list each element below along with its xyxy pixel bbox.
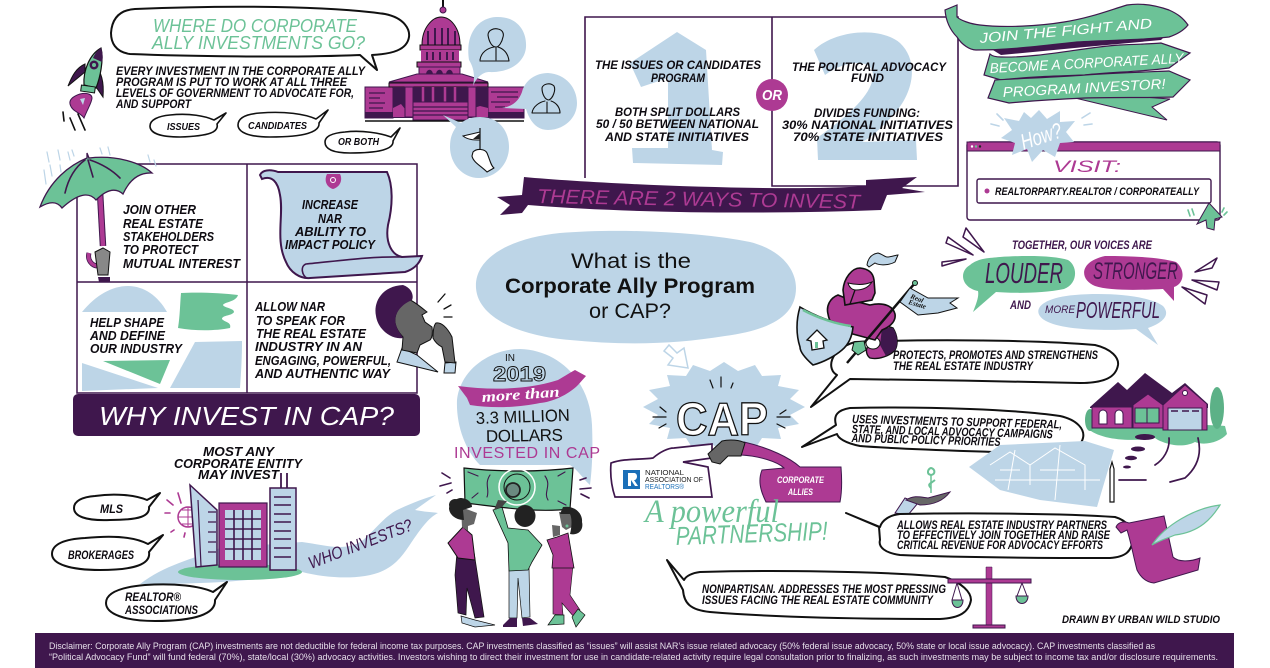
numeral 1: [630, 32, 723, 165]
blue bubble: [476, 231, 796, 343]
icon: knight with shield and flag: [797, 253, 958, 365]
speech bubble: where do corporate ally investments go: WHERE DO CORPORATE: [153, 16, 358, 36]
icon: three people looking at bill: [448, 498, 585, 627]
text: allow NAR: [254, 299, 391, 381]
text: option two: 70% STATE INITIATIVES: [793, 130, 943, 144]
grid lines: [77, 164, 417, 393]
speech bubble: where do corporate ally investments go: [111, 7, 409, 70]
icon: city buildings: [165, 473, 302, 580]
disclaimer footer: [35, 633, 1234, 668]
text block: every investment: LEVELS OF GOVERNMENT TO ADVOCATE FOR,: [116, 86, 354, 100]
text: option two: DIVIDES FUNDING:: [814, 106, 920, 120]
text: option one: AND STATE INITIATIVES: [604, 130, 749, 144]
shapes and text: help shape: AND DEFINE: [89, 328, 165, 343]
icon: person speaking: [375, 285, 456, 373]
bubble: protects: PROTECTS, PROMOTES AND STRENGTHENS: [893, 348, 1098, 362]
bubble: uses investments: USES INVESTMENTS TO SUPPORT FEDERAL,: [852, 412, 1062, 431]
bubble: MLS: MLS: [100, 502, 123, 516]
partnership: corporate allies box: ALLIES: [787, 487, 813, 497]
icon: hand with sprout: [895, 468, 950, 515]
bubble: issues: ISSUES: [167, 122, 200, 133]
bubble: or both: [325, 128, 400, 153]
text block: every investment: EVERY INVESTMENT IN THE CORPORATE ALLY: [116, 64, 366, 78]
bubble: stronger: [1084, 256, 1183, 301]
text: option one: PROGRAM: [651, 71, 706, 85]
text: in 2019: 2019: [493, 363, 546, 386]
browser window: REALTORPARTY.REALTOR / CORPORATEALLY: [995, 186, 1200, 198]
blue swoosh: [140, 495, 438, 584]
bubble: allows partners: TO EFFECTIVELY JOIN TOGETHER AND RAISE: [897, 528, 1111, 542]
badge: or: [756, 79, 788, 111]
bubble: uses investments: [802, 407, 1083, 454]
bubble: candidates: CANDIDATES: [248, 121, 307, 132]
text: allow NAR: TO SPEAK FOR: [256, 313, 346, 328]
text: option one: 50 / 50 BETWEEN NATIONAL: [596, 117, 759, 131]
text: most any corporate entity: MOST ANY: [203, 444, 275, 459]
panel: 2019 stat: [440, 349, 600, 627]
text: 3.3 million dollars: INVESTED IN CAP: [454, 445, 600, 462]
badge: or: OR: [762, 87, 782, 104]
icon: handshake: [708, 440, 745, 464]
text: and: AND: [1009, 298, 1031, 312]
partnership: corporate allies box: CORPORATE: [777, 475, 825, 485]
bubble: realtor associations: [106, 582, 227, 621]
scroll: increase NAR ability: NAR: [318, 211, 343, 226]
bubble: protects: THE REAL ESTATE INDUSTRY: [893, 359, 1034, 373]
text: 3.3 million dollars: DOLLARS: [486, 426, 563, 446]
title: what is the corporate ally program: Corporate Ally Program: [505, 275, 755, 298]
icon: bubble with person two: [502, 73, 577, 130]
text: join other: REAL ESTATE: [123, 216, 203, 231]
icon: dollar bill: [440, 468, 591, 510]
bubble: more powerful: [1038, 294, 1166, 345]
browser window: [967, 142, 1220, 220]
text block: every investment: AND SUPPORT: [115, 97, 192, 111]
panel: join the fight: [945, 4, 1227, 230]
partnership: NAR box: NATIONAL: [645, 470, 684, 477]
text: allow NAR: INDUSTRY IN AN: [255, 339, 363, 354]
text: a powerful partnership: [643, 494, 828, 551]
bubble: allows partners: [846, 513, 1133, 558]
text: allow NAR: AND AUTHENTIC WAY: [254, 366, 391, 381]
text: most any corporate entity: MAY INVEST: [198, 467, 280, 482]
bubble: protects: [811, 340, 1118, 407]
text: join the fight: JOIN THE FIGHT AND: [978, 15, 1153, 46]
text: join the fight: BECOME A CORPORATE ALLY: [989, 50, 1185, 76]
ribbon: more than: [458, 370, 586, 407]
text: join other: JOIN OTHER: [123, 202, 197, 217]
bubble: issues: [150, 113, 226, 137]
text: allow NAR: THE REAL ESTATE: [256, 326, 366, 341]
text: in 2019: IN: [505, 353, 515, 364]
bubble: nonpartisan: ISSUES FACING THE REAL ESTATE COMMUNITY: [702, 593, 934, 607]
bubble: MLS: [74, 493, 160, 520]
title: what is the corporate ally program: What is the: [571, 250, 691, 273]
icon: magenta scroll and quill: [1116, 505, 1220, 583]
disclaimer footer: “Political Advocacy Fund” will fund federal (70%), state/local (30%) advocacy activities. Investors wishing to direct their investment for use in candidate-related activity require legal consultation prior to finalizing, as such investments may be subject to income tax and/or disclosure requirements.: [49, 652, 1218, 663]
arrow to CAP: [664, 345, 688, 368]
scroll: increase NAR ability: [260, 170, 422, 278]
bubble: or both: OR BOTH: [338, 137, 380, 148]
icon: rocket: [63, 48, 103, 130]
title: what is the corporate ally program: [505, 250, 755, 323]
text: a powerful partnership: A powerful: [643, 494, 779, 530]
burst: how: How?: [1017, 118, 1065, 155]
bubble: louder: LOUDER: [985, 258, 1063, 290]
blue blob: [457, 349, 592, 485]
partnership: NAR box: REALTORS®: [645, 483, 685, 491]
text: in 2019: [493, 353, 546, 386]
text: option two: FUND: [851, 71, 884, 85]
ribbon: there are 2 ways to invest: THERE ARE 2 WAYS TO INVEST: [537, 186, 862, 214]
scroll: increase NAR ability: IMPACT POLICY: [285, 237, 376, 252]
ribbon: more than: more than: [481, 385, 560, 406]
panel: where do investments go: [63, 0, 577, 178]
bubble: nonpartisan: NONPARTISAN. ADDRESSES THE MOST PRESSING: [702, 582, 946, 596]
browser window: VISIT:: [1053, 157, 1121, 176]
text block: every investment: [115, 64, 366, 111]
text: option one: THE ISSUES OR CANDIDATES: [595, 58, 761, 72]
burst: how: [991, 110, 1092, 162]
shapes and text: help shape: [82, 286, 242, 391]
text: 3.3 million dollars: 3.3 MILLION: [475, 406, 570, 428]
disclaimer footer: Disclaimer: Corporate Ally Program (CAP) investments are not deductible for federal income tax purposes. CAP investments classified as “issues” will assist NAR’s issue related advocacy (50% federal issue advocacy, 50% state or local issue advocacy). CAP investments classified as: [49, 641, 1155, 652]
icon: scales: [948, 567, 1031, 628]
partnership: NAR box: [611, 444, 712, 497]
bubble: realtor associations: ASSOCIATIONS: [124, 603, 198, 617]
text: drawn by: DRAWN BY URBAN WILD STUDIO: [1062, 614, 1220, 626]
banner: why invest in CAP: WHY INVEST IN CAP?: [99, 401, 395, 431]
icon: knight with shield and flag: Estate: [906, 298, 927, 311]
text: most any corporate entity: [174, 444, 303, 482]
partnership: NAR box: ASSOCIATION OF: [645, 477, 703, 484]
logo: REALTOR block R: [623, 470, 640, 489]
icon: bubble with person one: [468, 17, 526, 86]
bubble: allows partners: CRITICAL REVENUE FOR ADVOCACY EFFORTS: [897, 538, 1103, 552]
panel: center question: [476, 231, 796, 368]
bubble: realtor associations: REALTOR®: [125, 590, 181, 604]
icon: capitol building: [365, 0, 524, 121]
bubble: uses investments: STATE, AND LOCAL ADVOCACY CAMPAIGNS: [852, 422, 1053, 441]
person: left woman: [448, 498, 495, 627]
person: middle man: [493, 500, 542, 627]
text: option two: 30% NATIONAL INITIATIVES: [782, 118, 953, 132]
bubble: nonpartisan: [667, 560, 971, 619]
icon: blueprint: [969, 441, 1114, 507]
text: option two: [782, 60, 953, 144]
ribbon: there are 2 ways to invest: [497, 177, 925, 215]
text: join other: [123, 202, 241, 271]
bubble: stronger: STRONGER: [1093, 258, 1178, 285]
title: what is the corporate ally program: or CAP?: [589, 300, 671, 323]
person: right woman: [547, 507, 585, 627]
bubble: allows partners: ALLOWS REAL ESTATE INDUSTRY PARTNERS: [896, 518, 1107, 532]
icon: umbrella and hand: [40, 147, 156, 282]
scroll: increase NAR ability: ABILITY TO: [294, 224, 366, 239]
icon: house: [1085, 373, 1227, 482]
bubble: brokerages: BROKERAGES: [68, 548, 134, 562]
text: option one: [595, 58, 761, 144]
numeral 2: [814, 32, 917, 160]
bubble: uses investments: AND PUBLIC POLICY PRIORITIES: [851, 431, 1001, 449]
bubble: more powerful: MORE: [1045, 304, 1076, 316]
panel: who invests: [52, 444, 438, 621]
speech bubble: where do corporate ally investments go: ALLY INVESTMENTS GO?: [151, 33, 365, 53]
scroll: increase NAR ability: INCREASE: [302, 197, 358, 212]
text: join the fight: PROGRAM INVESTOR!: [1002, 75, 1166, 100]
bubble: louder: [963, 256, 1075, 312]
burst: CAP: [643, 362, 805, 452]
panel: two ways to invest: [497, 17, 958, 215]
banner: why invest in CAP: [73, 394, 420, 436]
text: most any corporate entity: CORPORATE ENTITY: [174, 456, 303, 471]
panel: why invest grid: [40, 147, 456, 436]
panel: partnership benefits: [611, 253, 1227, 628]
text: who invests: WHO INVESTS?: [306, 515, 416, 573]
text: option two: THE POLITICAL ADVOCACY: [792, 60, 947, 74]
shapes and text: help shape: OUR INDUSTRY: [90, 341, 183, 356]
ribbons: [945, 4, 1190, 120]
icon: cursor: [1188, 203, 1227, 230]
text: join other: TO PROTECT: [123, 242, 199, 257]
text: join other: MUTUAL INTEREST: [123, 256, 241, 271]
panel: louder stronger more powerful: [942, 228, 1219, 345]
box outline: [585, 17, 958, 186]
burst: CAP: CAP: [676, 393, 768, 445]
shapes and text: help shape: HELP SHAPE: [90, 315, 164, 330]
text: option one: BOTH SPLIT DOLLARS: [615, 105, 740, 119]
icon: bubble with flag in hand: [443, 115, 509, 178]
text: allow NAR: ENGAGING, POWERFUL,: [255, 353, 391, 368]
bubble: more powerful: POWERFUL: [1076, 297, 1160, 323]
icon: pencil: [1110, 462, 1114, 502]
partnership: corporate allies box: [741, 442, 842, 502]
text block: every investment: PROGRAM IS PUT TO WORK AT ALL THREE: [116, 75, 348, 89]
bubble: candidates: [238, 110, 328, 137]
text: together: TOGETHER, OUR VOICES ARE: [1012, 238, 1153, 252]
icon: knight with shield and flag: Real: [908, 292, 925, 305]
text: join the fight: [978, 15, 1185, 100]
burst rays: [942, 228, 1219, 304]
text: allow NAR: ALLOW NAR: [254, 299, 326, 314]
text: join other: STAKEHOLDERS: [123, 229, 214, 244]
text: a powerful partnership: PARTNERSHIP!: [675, 516, 828, 551]
text: 3.3 million dollars: [454, 406, 600, 462]
bubble: brokerages: [52, 535, 163, 570]
